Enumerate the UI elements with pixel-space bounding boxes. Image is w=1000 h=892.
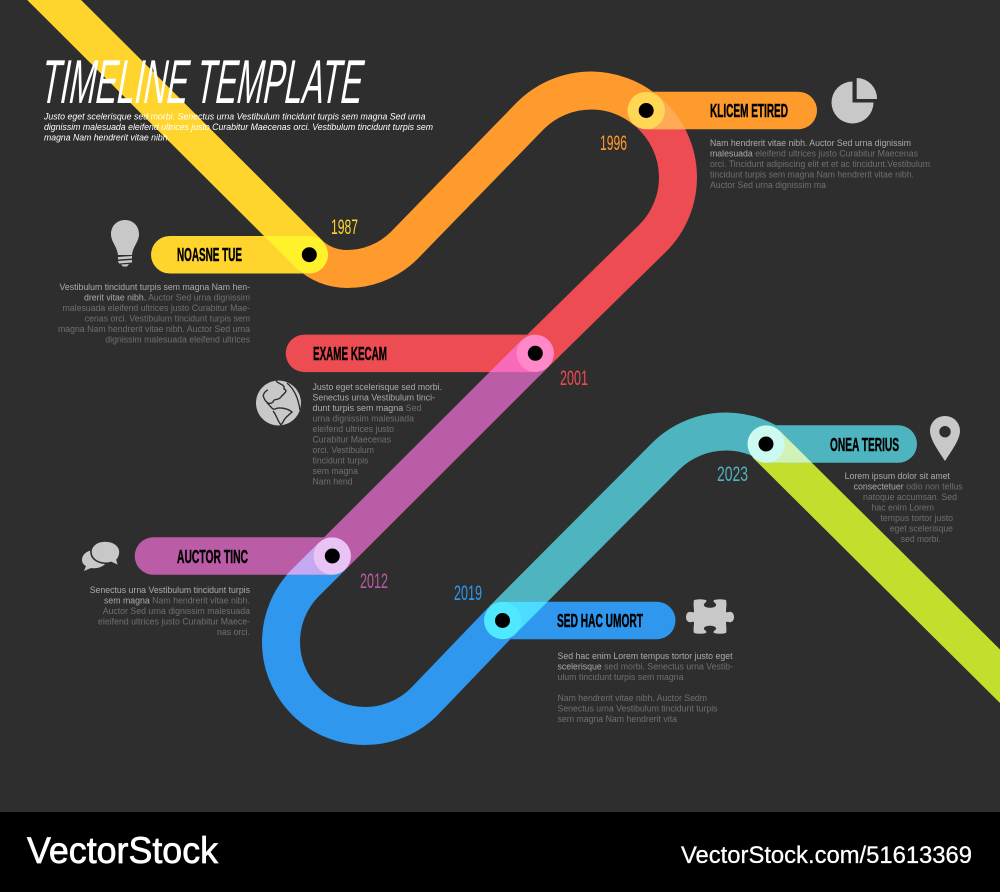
icon: pie chart: [832, 78, 877, 124]
body text: eleifend ultrices justo Curabitur Maece-: [98, 616, 250, 626]
body text: Nam hendrerit vitae nibh. Auctor Sedm: [558, 693, 707, 703]
body text: nas orci.: [217, 627, 250, 637]
band: purple segment: [332, 353, 535, 556]
overlap highlight: [484, 602, 548, 640]
event: 2001 Exame Kecam: [256, 334, 588, 484]
body text: [312, 382, 442, 486]
node dot: [302, 247, 317, 262]
body text: Senectus urna Vestibulum tinci-: [312, 392, 435, 402]
pill: Noasne Tue: [151, 236, 328, 274]
pill label: SED HAC UMORT: [557, 611, 643, 631]
pill: Auctor Tinc: [135, 537, 351, 575]
footer url: VectorStock.com/51613369: [681, 842, 972, 869]
band: green segment: [766, 444, 1000, 706]
event: 1996 Klicem Etired: [600, 78, 930, 190]
body text: Nam hend: [312, 476, 352, 486]
title: TIMELINE TEMPLATE: [36, 47, 369, 117]
footer logo: VectorStock: [27, 830, 218, 871]
body text: sem magna: [312, 466, 358, 476]
intro text: Justo eget scelerisque sed morbi. Senectus urna Vestibulum tincidunt turpis sem magna Sed urna: [43, 112, 426, 122]
band: orange segment: [309, 90, 646, 269]
footer bar: [0, 812, 1000, 892]
body text: [58, 282, 250, 344]
year: 1987: [331, 216, 358, 239]
body text: cenas orci. Vestibulum tincidunt turpis sem: [85, 314, 250, 324]
body text: malesuada eleifend ultrices justo Curabitur Maecenas: [710, 148, 918, 158]
body text: scelerisque sed morbi. Senectus urna Vestib-: [558, 662, 733, 672]
body text: sem magna Nam hendrerit vitae nibh.: [104, 596, 250, 606]
overlap highlight: [748, 425, 812, 463]
band: yellow segment: [14, 0, 310, 254]
year: 2023: [717, 463, 748, 486]
band: red segment: [535, 110, 678, 353]
icon: light bulb: [111, 220, 139, 266]
icon: speech bubbles: [82, 541, 120, 571]
body text: Vestibulum tincidunt turpis sem magna Nam hen-: [60, 282, 250, 292]
year: 1996: [600, 132, 627, 155]
body text: Sed hac enim Lorem tempus tortor justo eget: [558, 651, 733, 661]
pill: Sed Hac Umort: [484, 602, 676, 639]
body text: malesuada eleifend ultrices justo Curabitur Mae-: [62, 303, 250, 313]
pill: Klicem Etired: [628, 92, 817, 129]
body text: Auctor Sed urna dignissim malesuada: [103, 606, 250, 616]
body text: sem magna Nam hendrerit vita: [558, 714, 677, 724]
body text: urna dignissim malesuada: [312, 414, 414, 424]
band: teal segment: [502, 432, 767, 620]
event: 2019 Sed Hac Umort: [454, 586, 734, 724]
body text: consectetuer odio non tellus: [854, 482, 963, 492]
node dot: [325, 548, 340, 564]
icon: map pin: [930, 416, 960, 461]
event: 2012 Auctor Tinc: [82, 537, 388, 637]
body text: tincidunt turpis sem magna Nam hendrerit vitae nibh.: [710, 170, 914, 180]
band: blue segment: [281, 556, 502, 726]
overlap highlight: [490, 334, 554, 372]
body text: Auctor Sed urna dignissim ma: [710, 180, 826, 190]
body text: natoque accumsan. Sed: [863, 492, 957, 502]
node dot: [495, 613, 510, 628]
pill: Exame Kecam: [286, 335, 554, 372]
body text: [90, 585, 250, 637]
intro text: dignissim malesuada eleifend ultrices justo Curabitur Maecenas orci. Vestibulum tincidunt turpis sem: [44, 122, 433, 132]
body text: Senectus urna Vestibulum tincidunt turpis: [558, 704, 718, 714]
intro text: magna Nam hendrerit vitae nibh.: [44, 132, 170, 142]
pill: Onea Terius: [748, 425, 917, 463]
year: 2001: [560, 367, 588, 390]
pill label: KLICEM ETIRED: [710, 101, 788, 121]
node dot: [528, 346, 543, 361]
body text: [710, 138, 930, 190]
body text: Curabitur Maecenas: [312, 434, 391, 444]
body text: orci. Vestibulum: [312, 445, 374, 455]
pill label: NOASNE TUE: [177, 245, 242, 265]
body text: [845, 471, 963, 544]
body text: Justo eget scelerisque sed morbi.: [312, 382, 442, 392]
event: 1987 Noasne Tue: [58, 220, 358, 344]
body text: orci. Tincidunt adipiscing elit et et ac tincidunt.Vestibulum: [710, 159, 930, 169]
overlap highlight: [286, 537, 351, 575]
body text: sed morbi.: [901, 534, 941, 544]
pill label: EXAME KECAM: [313, 344, 387, 364]
intro text: [43, 112, 433, 142]
body text: Nam hendrerit vitae nibh. Auctor Sed urna dignissim: [710, 138, 911, 148]
year: 2019: [454, 582, 482, 605]
pill label: AUCTOR TINC: [177, 547, 248, 567]
body text: tincidunt turpis: [312, 456, 369, 466]
overlap highlight: [264, 236, 328, 274]
body text: dunt turpis sem magna Sed: [312, 403, 422, 413]
body text: eget scelerisque: [890, 524, 953, 534]
icon: puzzle piece: [686, 599, 734, 634]
body text: eleifend ultrices justo: [312, 424, 394, 434]
icon: globe: [256, 380, 301, 426]
body text: magna Nam hendrerit vitae nibh. Auctor Sed urna: [58, 324, 250, 334]
body text: hac enim Lorem: [872, 502, 934, 512]
body text: drerit vitae nibh. Auctor Sed urna dignissim: [84, 292, 250, 302]
year: 2012: [360, 570, 388, 593]
pill label: ONEA TERIUS: [830, 435, 899, 455]
body text: tempus tortor justo: [880, 513, 953, 523]
node dot: [758, 436, 774, 452]
overlap highlight: [628, 92, 686, 130]
body text: [558, 651, 733, 724]
event: 2023 Onea Terius: [718, 416, 962, 542]
body text: ulum tincidunt turpis sem magna: [558, 672, 684, 682]
node dot: [639, 103, 654, 118]
body text: dignissim malesuada eleifend ultrices: [105, 334, 250, 344]
body text: Lorem ipsum dolor sit amet: [845, 471, 950, 481]
body text: Senectus urna Vestibulum tincidunt turpis: [90, 585, 250, 595]
